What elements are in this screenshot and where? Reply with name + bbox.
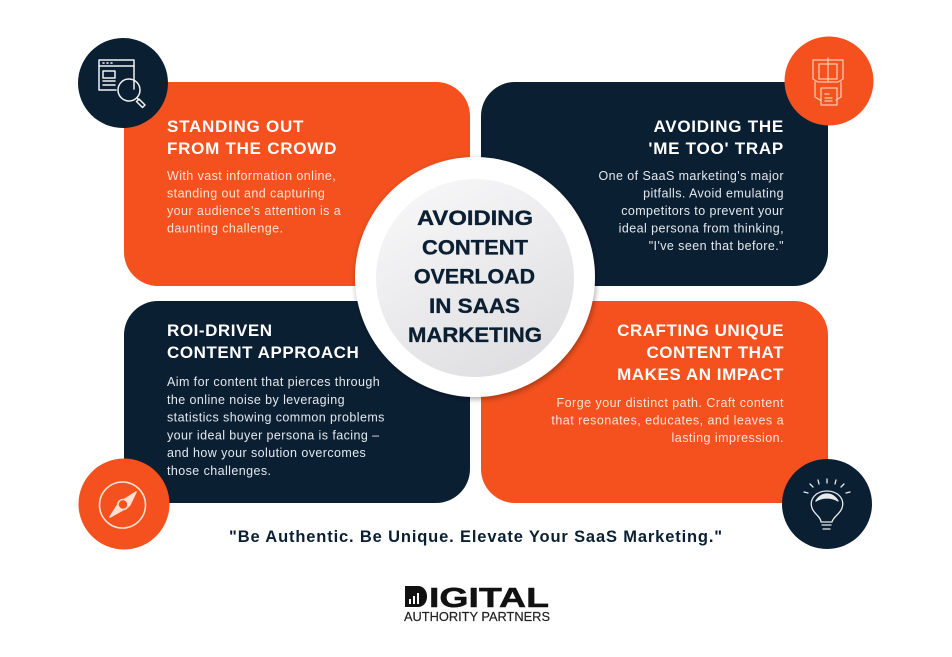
- logo: digital authority partners: [404, 582, 550, 624]
- title: CONTENT: [422, 236, 528, 260]
- heading: me too trap: AVOIDING THE: [653, 117, 784, 136]
- body text: roi-driven: statistics showing common problems: [167, 411, 385, 425]
- title: OVERLOAD: [414, 264, 535, 288]
- body text: me too trap: "I've seen that before.": [649, 239, 784, 253]
- body text: crafting unique: that resonates, educates, and leaves a: [551, 414, 784, 428]
- heading: roi-driven: CONTENT APPROACH: [167, 343, 359, 362]
- body text: standing out: standing out and capturing: [167, 186, 325, 200]
- panel: roi-driven content approach: [124, 301, 470, 503]
- heading: me too trap: 'ME TOO' TRAP: [648, 139, 784, 158]
- panel: standing out from the crowd: [124, 82, 470, 286]
- title: AVOIDING: [417, 206, 533, 230]
- title: IN SAAS: [429, 294, 520, 318]
- body text: crafting unique: lasting impression.: [672, 431, 784, 445]
- tagline: "Be Authentic. Be Unique. Elevate Your SaaS Marketing.": [229, 528, 723, 546]
- body text: standing out: daunting challenge.: [167, 222, 283, 236]
- center circle title: [355, 157, 595, 397]
- icon: compass: [78, 458, 170, 550]
- body text: roi-driven: the online noise by leveraging: [167, 393, 345, 407]
- body text: standing out: With vast information online,: [167, 169, 336, 183]
- body text: roi-driven: Aim for content that pierces through: [167, 375, 380, 389]
- body text: me too trap: competitors to prevent your: [621, 204, 784, 218]
- icon: mobile and document workflow: [784, 36, 874, 126]
- heading: crafting unique: MAKES AN IMPACT: [617, 365, 784, 384]
- icon: browser with magnifier: [78, 38, 168, 128]
- heading: crafting unique: CRAFTING UNIQUE: [617, 321, 784, 340]
- title: MARKETING: [408, 323, 542, 347]
- body text: standing out: your audience's attention is a: [167, 204, 341, 218]
- heading: crafting unique: CONTENT THAT: [646, 343, 784, 362]
- logo subtitle: AUTHORITY PARTNERS: [404, 610, 550, 624]
- title: [408, 206, 542, 347]
- panel: avoiding the me too trap: [481, 82, 828, 286]
- body text: roi-driven: your ideal buyer persona is facing –: [167, 428, 379, 442]
- body text: me too trap: ideal persona from thinking,: [619, 222, 784, 236]
- body text: me too trap: One of SaaS marketing's major: [599, 169, 784, 183]
- icon: light bulb: [782, 459, 872, 549]
- body text: crafting unique: Forge your distinct path. Craft content: [557, 396, 784, 410]
- body text: roi-driven: those challenges.: [167, 464, 271, 478]
- body text: me too trap: pitfalls. Avoid emulating: [643, 186, 784, 200]
- logo wordmark: IGITAL: [429, 582, 549, 613]
- heading: standing out: FROM THE CROWD: [167, 139, 337, 158]
- body text: roi-driven: and how your solution overcomes: [167, 446, 366, 460]
- panel: crafting unique content: [481, 301, 828, 503]
- logo bar icon: [405, 586, 427, 607]
- heading: standing out: STANDING OUT: [167, 117, 304, 136]
- heading: roi-driven: ROI-DRIVEN: [167, 321, 273, 340]
